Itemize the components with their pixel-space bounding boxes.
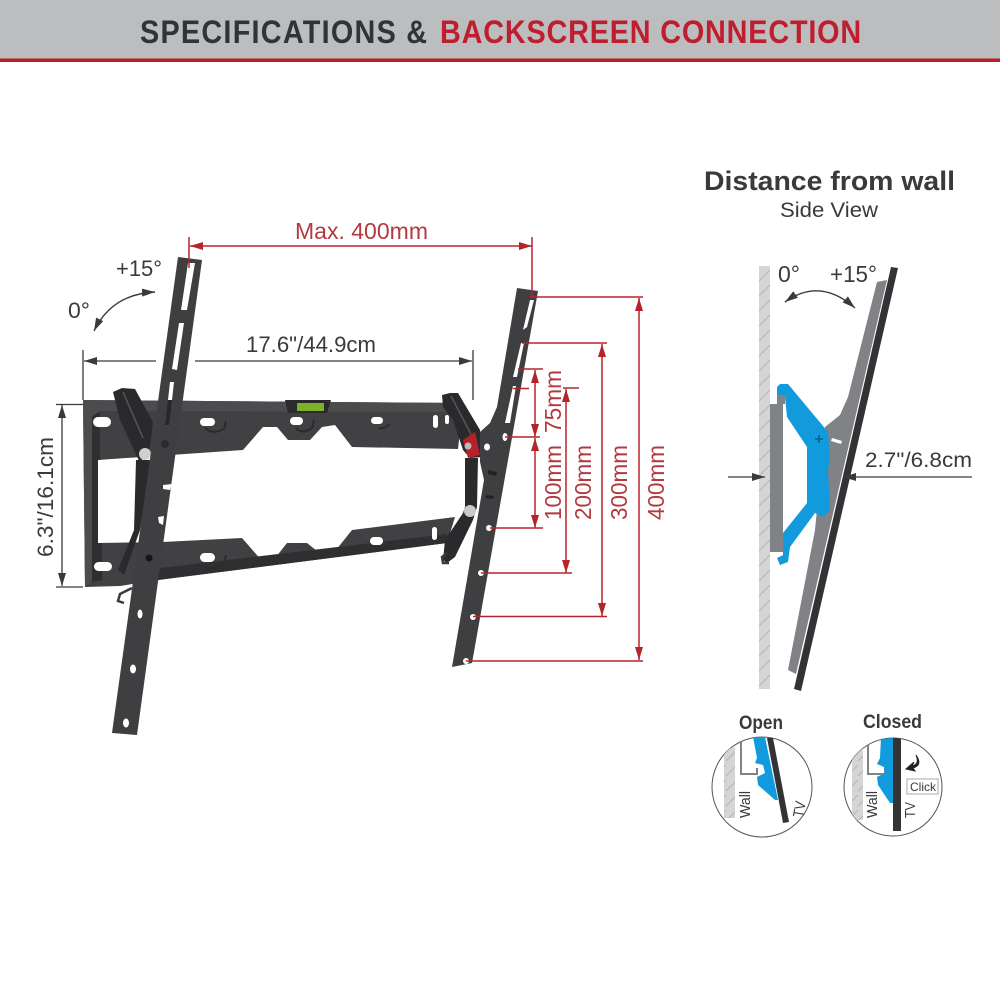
- click arrow icon: [906, 755, 919, 771]
- gray tv arm: [788, 280, 887, 674]
- dimension: max 400mm width: [189, 218, 532, 297]
- side view diagram: [728, 261, 972, 691]
- heading: distance from wall: Side View: [780, 199, 879, 222]
- open detail: TV: [790, 800, 810, 819]
- dimension: bracket height 6.3in: 6.3"/16.1cm: [33, 437, 58, 557]
- closed detail: Wall: [864, 791, 881, 818]
- dimension: bracket height 6.3in: [33, 404, 83, 587]
- side angle labels: +15°: [830, 261, 877, 287]
- open detail: Wall: [737, 791, 754, 818]
- click label: Click: [910, 780, 937, 794]
- side angle labels: 0°: [778, 261, 800, 287]
- closed detail: TV: [902, 802, 919, 818]
- closed detail: [844, 712, 942, 836]
- open detail: Open: [739, 713, 783, 734]
- heading: distance from wall: Distance from wall: [704, 166, 955, 196]
- tilt angle indicator: [68, 256, 162, 331]
- open detail: [712, 713, 812, 837]
- VESA dimensions: 100mm: [540, 445, 566, 520]
- right tilt arm: [442, 393, 482, 563]
- right vertical strap: [452, 288, 538, 667]
- dimension: bracket width 17.6in: [83, 332, 473, 400]
- VESA dimensions: 400mm: [643, 445, 669, 520]
- VESA dimensions: 200mm: [570, 445, 596, 520]
- side angle labels: [778, 261, 877, 308]
- VESA dimensions: 300mm: [606, 445, 632, 520]
- blue tilt bracket: [777, 384, 842, 565]
- left tilt arm: [113, 388, 153, 603]
- wall plate: [83, 400, 463, 587]
- black tv panel: [794, 267, 898, 691]
- gray wall plate: [770, 404, 783, 552]
- tilt angle indicator: +15°: [116, 256, 162, 281]
- closed detail: Closed: [863, 712, 922, 733]
- spirit level: [285, 400, 331, 413]
- header band: [0, 0, 1000, 62]
- VESA dimensions: [466, 297, 669, 661]
- VESA dimensions: 75mm: [540, 370, 566, 433]
- heading: backscreen connection: BACKSCREEN CONNECTION: [440, 15, 861, 50]
- depth dimension: 2.7"/6.8cm: [865, 449, 972, 472]
- dimension: max 400mm width: Max. 400mm: [295, 218, 428, 244]
- heading: distance from wall: [704, 166, 955, 222]
- left vertical strap: [112, 257, 202, 735]
- dimension: bracket width 17.6in: 17.6"/44.9cm: [246, 332, 376, 357]
- heading: specifications: SPECIFICATIONS &: [140, 15, 427, 50]
- tilt angle indicator: 0°: [68, 298, 90, 323]
- wall: [759, 266, 770, 689]
- wall mount bracket: [83, 257, 538, 735]
